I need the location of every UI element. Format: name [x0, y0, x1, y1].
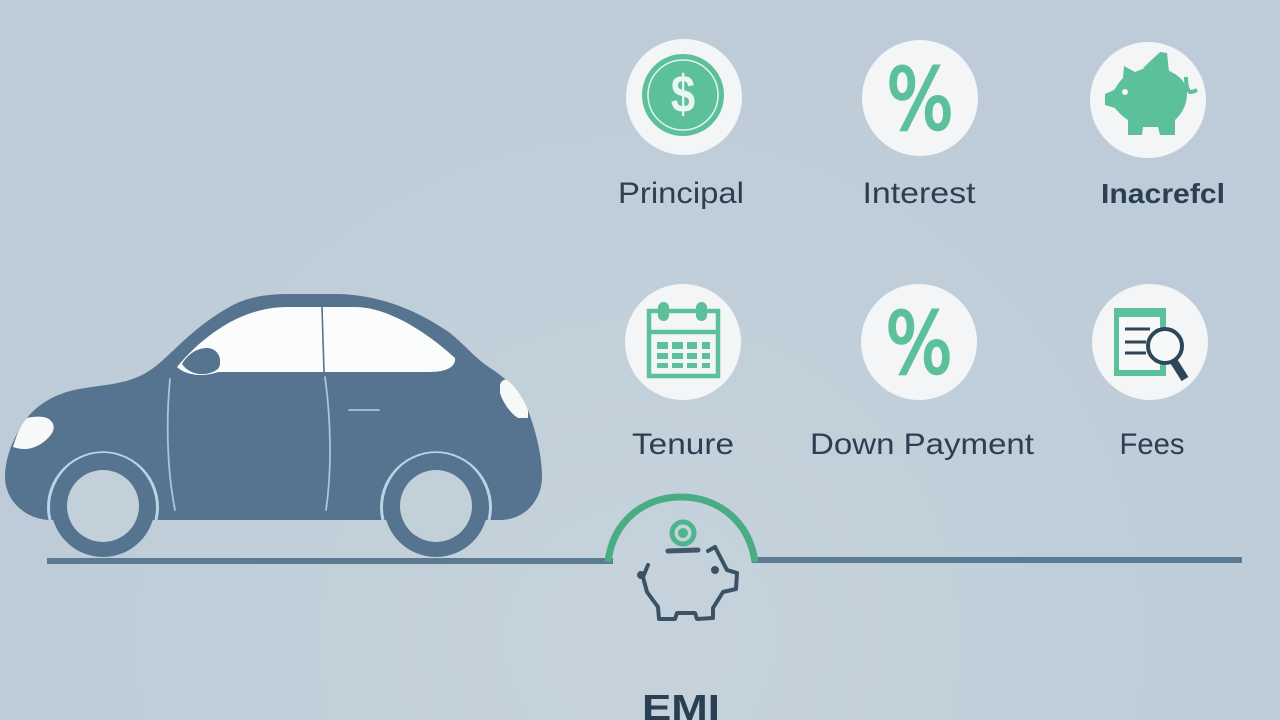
icon: coin [672, 522, 694, 544]
icon: coin slot [668, 550, 698, 551]
label: Interest: Interest [862, 177, 976, 210]
car body [5, 294, 542, 520]
icon: outline piggy bank [639, 547, 737, 619]
label: garbled text: Inacrefcl [1101, 178, 1225, 209]
label: Down Payment: Down Payment [810, 428, 1035, 461]
icon: percent: % [885, 296, 953, 394]
front headlight [13, 417, 54, 449]
arch [608, 497, 755, 562]
rear wheel [382, 453, 490, 557]
side mirror [182, 348, 220, 374]
ground line: left [47, 558, 613, 564]
factor: Principal [618, 39, 744, 210]
front wheel [48, 453, 157, 557]
car windows [177, 307, 455, 375]
icon: percent [861, 284, 977, 400]
icon: dollar coin: $ [671, 65, 695, 124]
ground line: right [752, 557, 1242, 563]
label: Fees: Fees [1120, 428, 1184, 461]
factor: Tenure [625, 284, 741, 461]
illustration: car [5, 294, 542, 557]
icon: percent [862, 40, 978, 156]
icon: dollar coin [626, 39, 742, 155]
factor: Fees [1092, 284, 1208, 461]
factor: Down Payment [810, 284, 1035, 461]
rear headlight [500, 380, 528, 418]
icon: green piggy bank [1090, 42, 1206, 158]
label: Tenure: Tenure [632, 428, 734, 461]
icon: calendar [625, 284, 741, 400]
icon: document with magnifier [1092, 284, 1208, 400]
label: Principal: Principal [618, 177, 744, 210]
EMI section [608, 497, 755, 720]
icon: percent: % [886, 52, 954, 150]
factor: garbled savings label [1090, 42, 1225, 209]
window divider [322, 307, 324, 372]
door seams and handle [168, 377, 379, 510]
factor: Interest [862, 40, 978, 210]
